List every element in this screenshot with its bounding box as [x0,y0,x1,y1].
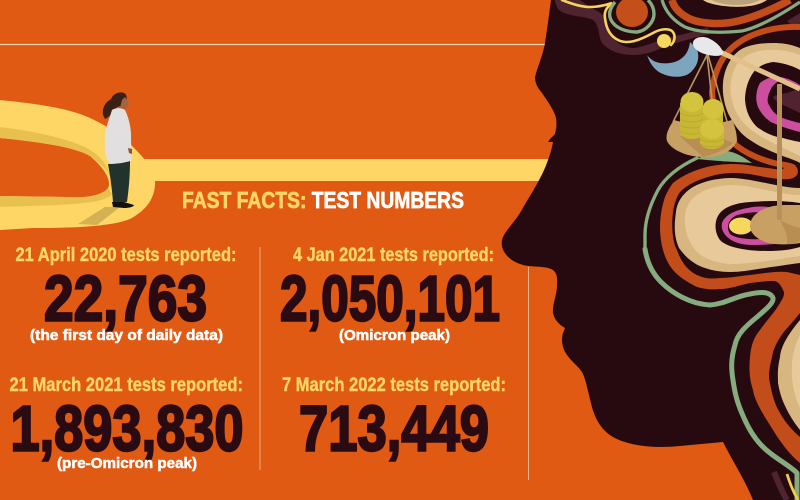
heading: fast facts: FAST FACTS: TEST NUMBERS [182,187,464,213]
orange blob [616,0,648,27]
cotton swab head [693,37,723,56]
hair top dark backing [580,0,800,48]
orange top band [672,0,790,23]
coin stacks [680,92,724,149]
rear coin stack [703,108,723,140]
blue crescent [647,42,698,77]
right tan highlight [792,335,800,408]
stat block: 4 Jan 2021: (Omicron peak) [339,328,450,344]
road shading lower [0,188,112,207]
scale strings [673,55,734,146]
left pan inner shade [680,130,733,157]
tan lower lobe highlight [685,185,800,264]
balance scale with cotton swab beam [666,37,800,244]
orange band upper arc [712,27,800,168]
green wedge [697,151,752,163]
neck yellow line [787,474,798,500]
tan lower lobe [675,178,800,272]
stat block: 4 Jan 2021: 4 Jan 2021 tests reported: [293,245,494,266]
lower pocket dark [716,201,800,251]
tan top lobe [703,0,767,7]
right pan [750,205,800,244]
hair [103,92,127,119]
upper pocket dark [745,62,800,142]
stat block: 7 March 2022: 7 March 2022 tests reported: [282,375,506,396]
tan top lobe inner [712,0,760,5]
shoes [112,202,134,208]
road shading upper [0,127,110,176]
stat block: 7 March 2022 [282,375,506,464]
right pan shade [780,220,800,244]
green S line lower [645,249,797,500]
horizontal yellow band [140,159,552,181]
stat block: 21 March 2021: 21 March 2021 tests reported: [10,375,243,396]
face [120,97,129,109]
stat block: 21 April 2020: (the first day of daily data) [30,328,223,344]
green top line [662,0,800,32]
white coat [105,108,131,164]
stat block: 7 March 2022: 713,449 [299,392,489,464]
stat block: 21 April 2020 [16,245,236,344]
left pan [666,120,737,157]
lower pocket magenta [722,206,775,245]
yellow scroll line [562,0,675,45]
plum hair ornament [555,0,710,55]
stat block: 21 March 2021: (pre-Omicron peak) [57,456,197,472]
orange band lower sweep [660,164,800,463]
tan upper highlight [731,50,800,156]
upper pocket plum [773,88,800,113]
stat block: 21 April 2020: 22,763 [44,262,207,334]
hand [128,148,132,154]
front coin stack [700,130,724,149]
woman figure [103,92,134,208]
yellow disc [657,34,671,48]
green scroll line [610,0,654,32]
stat block: 21 March 2021: 1,893,830 [10,392,244,464]
trousers [108,161,130,202]
stat block: 4 Jan 2021 [280,245,500,344]
swab stick beam [716,50,800,89]
lower pocket inner dark [728,212,775,239]
upper pocket inner dark [768,80,800,123]
stat block: 21 March 2021 [10,375,244,472]
lower pocket yellow [729,218,753,234]
stat block: 21 April 2020: 21 April 2020 tests reported: [16,245,236,266]
left coin stack [680,103,703,139]
upper pocket magenta [756,77,800,132]
neck plum line [774,472,787,500]
face profile [502,0,800,500]
yellow winding path with standing woman [0,92,552,230]
scale stem [777,84,782,220]
plum top right [787,13,800,27]
woman's shadow [78,207,120,225]
tan upper lobe [723,43,800,163]
head silhouette illustration [502,0,800,500]
right tan lobe [778,320,800,430]
green S line upper [645,158,697,250]
stat block: 4 Jan 2021: 2,050,101 [280,262,500,334]
curved yellow road [0,100,155,230]
